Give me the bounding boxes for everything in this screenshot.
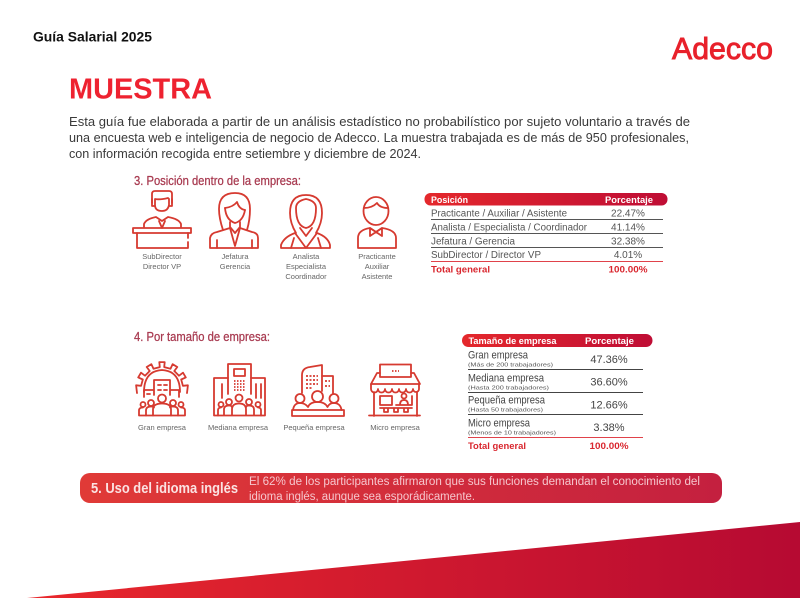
table: position: Practicante / Auxiliar / Asistente — [431, 208, 567, 220]
icon labels: positions: Asistente — [362, 272, 392, 281]
icon: medium company — [214, 364, 265, 416]
icon: analyst woman — [281, 195, 330, 248]
icon: micro company — [369, 364, 420, 416]
icon labels: positions: SubDirector — [142, 252, 182, 261]
table: company size: 12.66% — [590, 400, 628, 412]
table: company size: (Hasta 50 trabajadores) — [468, 408, 543, 414]
table: position: Jefatura / Gerencia — [431, 236, 515, 248]
icon labels: positions: Jefatura — [221, 252, 249, 261]
table: company size: Micro empresa — [468, 418, 531, 430]
table: company size: Total general — [468, 441, 526, 452]
table: company size: 3.38% — [593, 422, 625, 434]
table: position: Analista / Especialista / Coordinador — [431, 222, 588, 234]
icon labels: positions: Especialista — [286, 262, 327, 271]
table: company size: Porcentaje — [585, 336, 634, 347]
table: position: Porcentaje — [605, 195, 653, 206]
icon: trainee man — [358, 197, 396, 248]
banner: use of English — [80, 473, 722, 503]
table: company size: Pequeña empresa — [468, 394, 546, 406]
icon: manager woman — [210, 193, 258, 248]
table: position: Posición — [431, 195, 468, 206]
banner: use of English: idioma inglés, aunque sea esporádicamente. — [249, 491, 475, 503]
table: position: 100.00% — [608, 264, 648, 276]
icon labels: company sizes: Mediana empresa — [208, 423, 269, 432]
table: company size: (Más de 200 trabajadores) — [468, 362, 553, 368]
icon labels: company sizes: Micro empresa — [370, 423, 421, 432]
intro paragraph: una encuesta web e inteligencia de negocio de Adecco. La muestra trabajada es de más de 950 profesionales, — [69, 130, 689, 145]
icon: large company — [136, 362, 188, 416]
table: position — [424, 193, 668, 276]
section 4 heading: 4. Por tamaño de empresa: — [134, 330, 270, 344]
table: company size: 100.00% — [590, 441, 629, 452]
table: company size: Tamaño de empresa — [468, 336, 557, 347]
table: company size: Gran empresa — [468, 350, 529, 362]
table: position: 22.47% — [611, 208, 645, 220]
icon labels: company sizes: Gran empresa — [138, 423, 187, 432]
table: company size: Mediana empresa — [468, 372, 545, 384]
icon labels: positions: Auxiliar — [365, 262, 390, 271]
table: company size: (Hasta 200 trabajadores) — [468, 386, 549, 392]
decorative footer wedge — [27, 522, 800, 598]
intro paragraph — [69, 114, 690, 161]
table: company size: 36.60% — [590, 376, 628, 388]
section 3 heading: 3. Posición dentro de la empresa: — [134, 174, 301, 188]
icon labels: positions: Gerencia — [220, 262, 251, 271]
page header label: Guía Salarial 2025 — [33, 30, 153, 44]
table: company size: (Menos de 10 trabajadores) — [468, 430, 556, 436]
logo: Adecco: Adecco — [672, 31, 773, 66]
icon labels: company sizes: Pequeña empresa — [283, 423, 345, 432]
icon labels: positions: Coordinador — [285, 272, 327, 281]
table: company size: 47.36% — [590, 354, 628, 366]
table: company size — [462, 334, 652, 452]
table: position: 41.14% — [611, 222, 645, 234]
icon: director at desk — [133, 191, 191, 248]
icon labels: positions: Analista — [293, 252, 320, 261]
intro paragraph: con información recogida entre setiembre y diciembre de 2024. — [69, 146, 421, 161]
icon labels: company sizes — [138, 423, 421, 432]
table: position: 4.01% — [614, 250, 642, 261]
title: MUESTRA — [69, 74, 212, 106]
banner: use of English: El 62% de los participantes afirmaron que sus funciones demandan el conocimiento del — [249, 476, 700, 488]
icon labels: positions — [142, 252, 396, 281]
icon labels: positions: Practicante — [358, 252, 396, 261]
table: position: 32.38% — [611, 236, 645, 248]
icon: small company — [292, 365, 344, 416]
intro paragraph: Esta guía fue elaborada a partir de un análisis estadístico no probabilístico por sujeto voluntario a través de — [69, 114, 690, 129]
icon labels: positions: Director VP — [143, 262, 181, 271]
table: position: SubDirector / Director VP — [431, 250, 541, 261]
table: position: Total general — [431, 264, 490, 276]
banner: use of English: 5. Uso del idioma inglés — [91, 481, 238, 497]
